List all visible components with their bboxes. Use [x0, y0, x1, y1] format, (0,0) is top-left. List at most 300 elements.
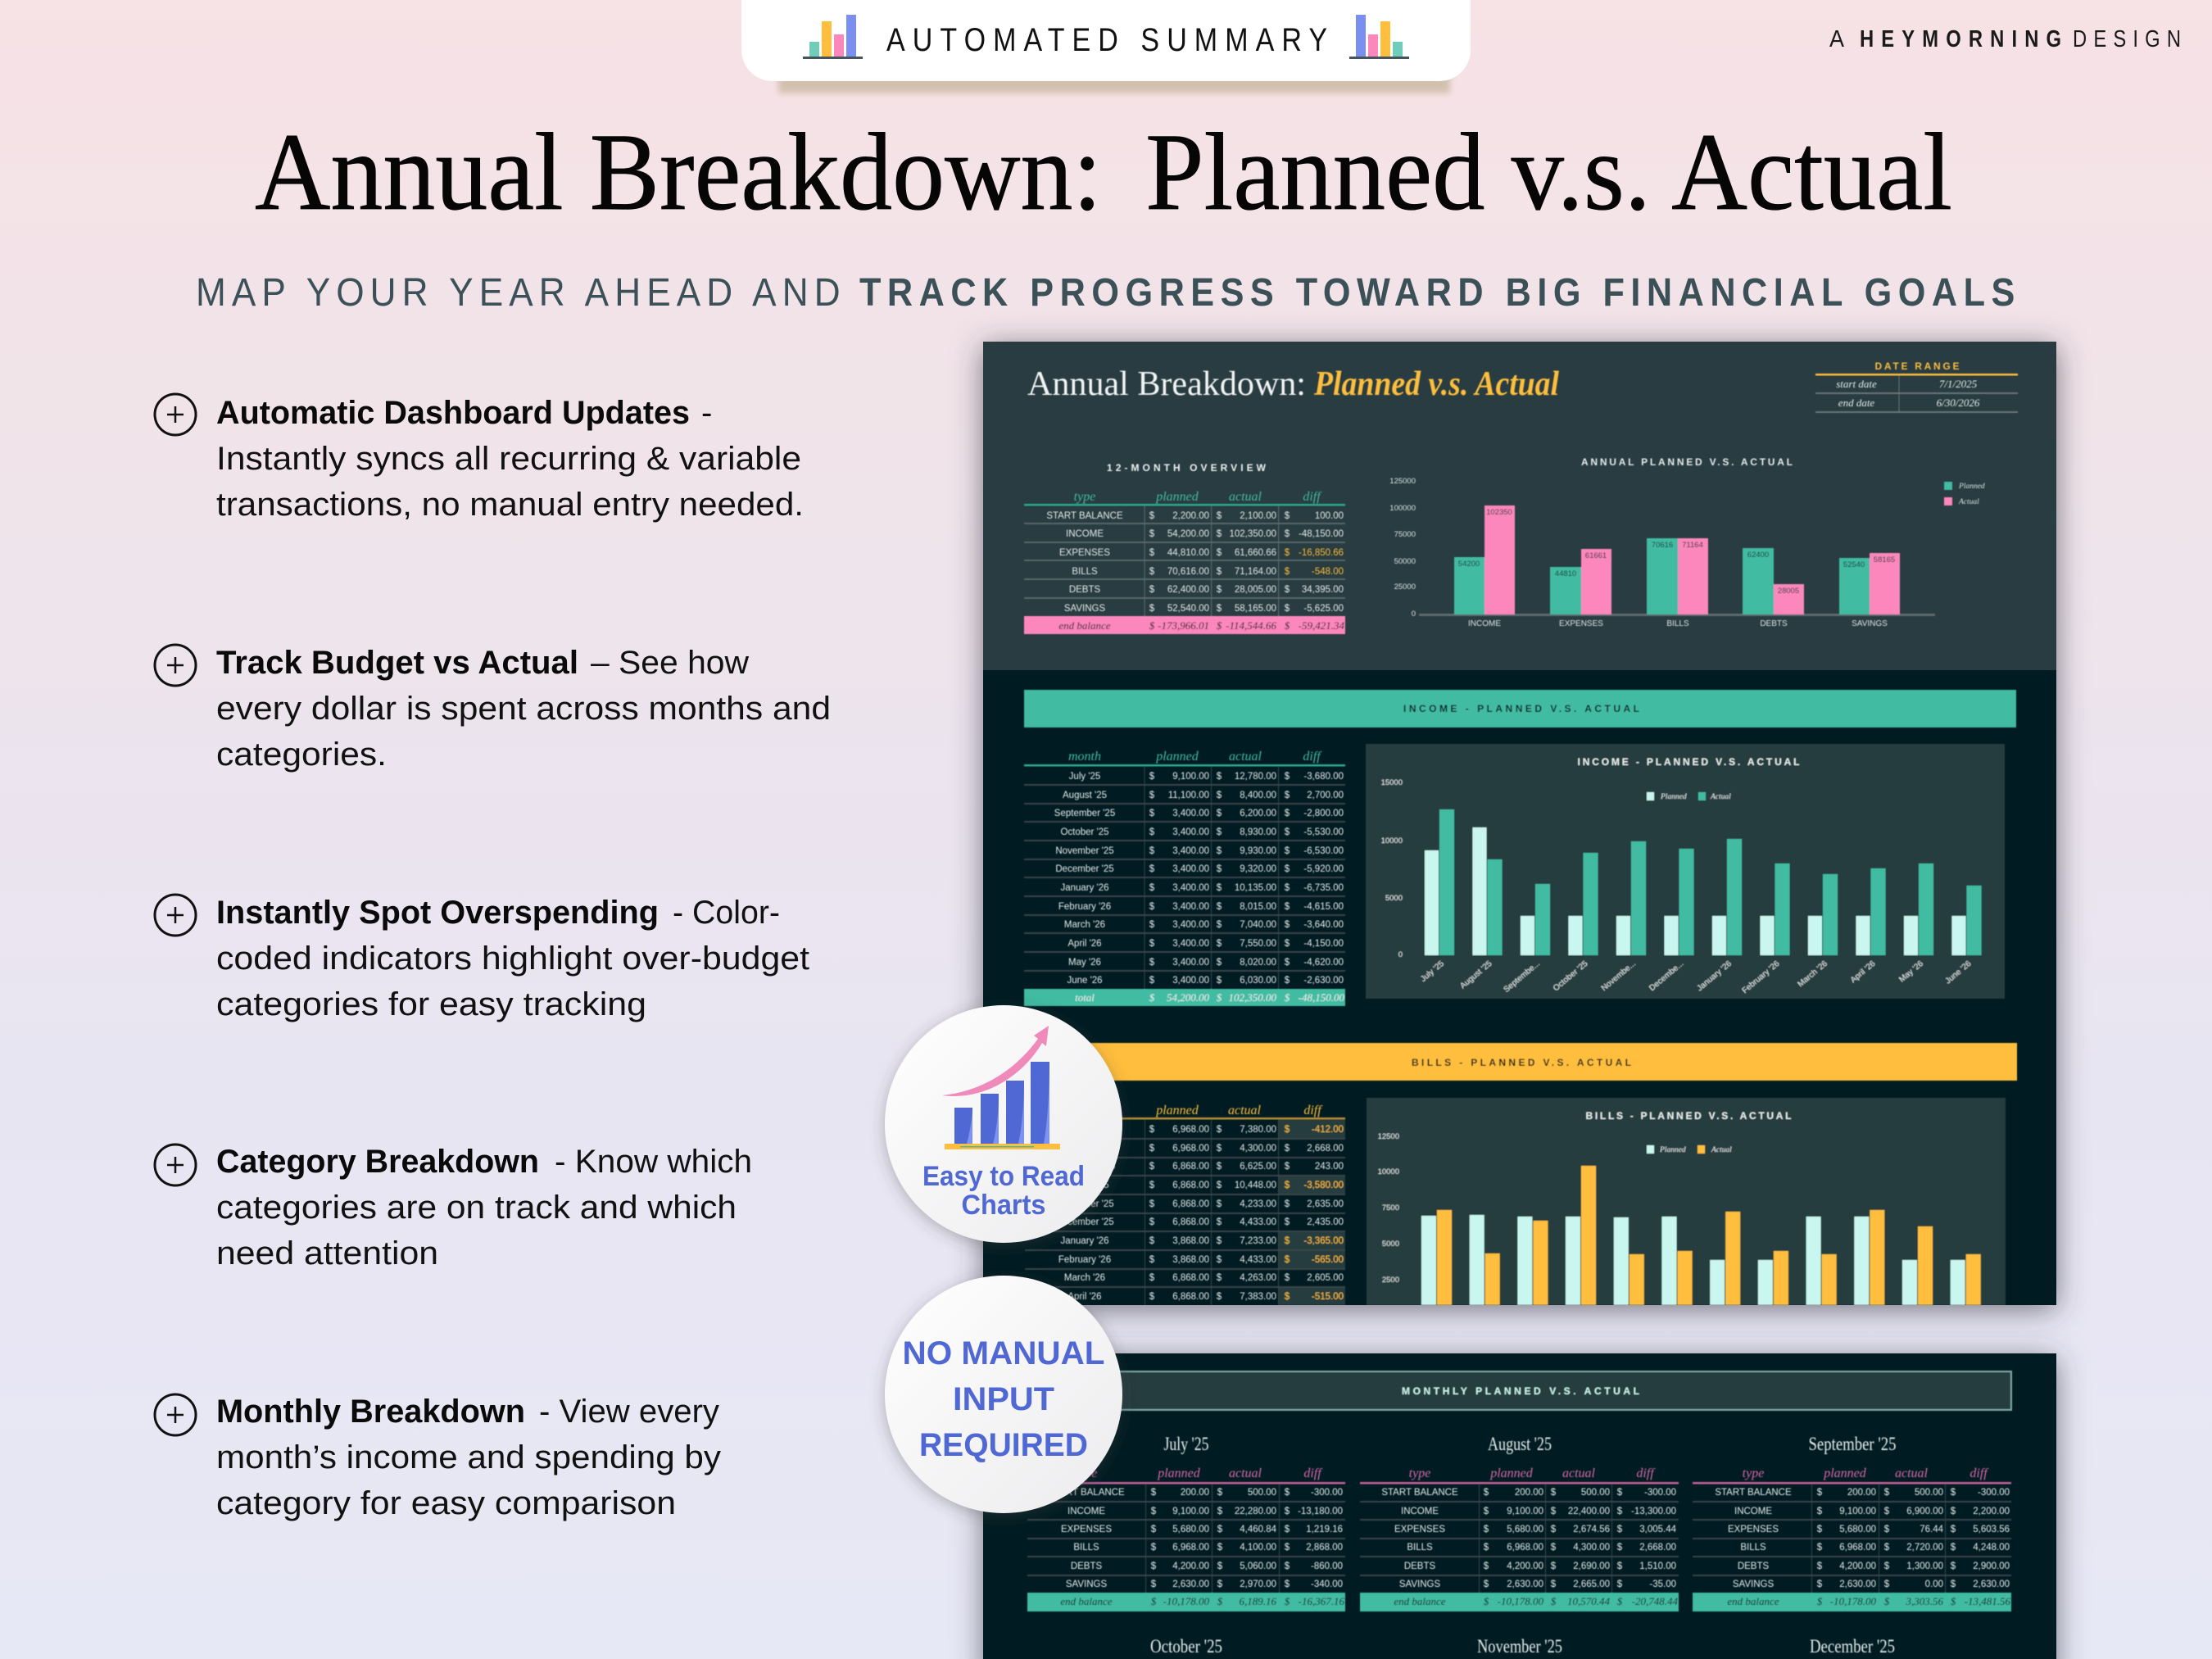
chart: bills planned vs actual: BILLS - PLANNED V.S. ACTUAL	[1586, 1110, 1791, 1122]
subtitle	[196, 270, 2015, 315]
table: bills by month: $	[1217, 1199, 1222, 1209]
table: bills by month: $	[1217, 1162, 1222, 1172]
table: bills by month: $	[1149, 1144, 1155, 1154]
table: august: $	[1551, 1488, 1557, 1498]
table: income by month: $	[1285, 976, 1290, 986]
table: bills by month: April '26	[1067, 1292, 1102, 1302]
table: 12-month overview: -5,625.00	[1303, 604, 1344, 614]
table: 12-month overview: -59,421.34	[1299, 619, 1344, 632]
table: august: -20,748.44	[1632, 1595, 1678, 1607]
table: bills by month: $	[1149, 1162, 1155, 1172]
table: july: SAVINGS	[1066, 1580, 1107, 1589]
table: september: $	[1884, 1507, 1890, 1516]
table: income by month: November '25	[1055, 846, 1114, 856]
table: bills by month: 7,380.00	[1240, 1125, 1276, 1135]
table: july: diff	[1303, 1466, 1323, 1480]
table: 12-month overview: 62,400.00	[1167, 585, 1209, 595]
table: september: -300.00	[1978, 1488, 2010, 1498]
table: bills by month: 3,868.00	[1172, 1255, 1209, 1265]
month headings	[1150, 1434, 1896, 1657]
date range table: start date	[1836, 378, 1877, 390]
table: july: 500.00	[1248, 1488, 1276, 1498]
chart: annual planned vs actual: Actual	[1958, 498, 1979, 506]
month headings: July '25	[1163, 1434, 1209, 1454]
table: bills by month: 4,263.00	[1240, 1273, 1276, 1283]
table: income by month: $	[1149, 827, 1155, 837]
table: august: $	[1551, 1562, 1557, 1571]
table: september: 1,300.00	[1906, 1562, 1943, 1571]
table: income by month: $	[1285, 772, 1290, 782]
table: income by month: $	[1217, 991, 1222, 1004]
table: 12-month overview: $	[1285, 585, 1290, 595]
table: 12-month overview: 52,540.00	[1167, 604, 1209, 614]
table: july: 4,200.00	[1172, 1562, 1209, 1571]
table: july: 6,968.00	[1172, 1543, 1209, 1552]
table: 12-month overview: 71,164.00	[1235, 567, 1276, 577]
table: 12-month overview: START BALANCE	[1046, 511, 1123, 521]
table: income by month: 7,550.00	[1240, 939, 1276, 949]
table: income by month: -5,920.00	[1303, 864, 1344, 874]
table: 12-month overview: $	[1285, 604, 1290, 614]
table: august: 22,400.00	[1568, 1507, 1610, 1516]
table: 12-month overview: 28,005.00	[1235, 585, 1276, 595]
feature: instantly spot overspending: coded indicators highlight over-budget	[216, 941, 809, 977]
table: september: $	[1951, 1525, 1956, 1534]
table: september: end balance	[1727, 1595, 1779, 1607]
table: bills by month: $	[1149, 1273, 1155, 1283]
table: august: 2,674.56	[1573, 1525, 1610, 1534]
table: income by month: diff	[1303, 750, 1322, 764]
table: bills by month: February '26	[1058, 1255, 1111, 1265]
chart: annual planned vs actual: 75000	[1394, 530, 1416, 539]
table: july: START BALANCE	[1048, 1488, 1125, 1498]
table: bills by month: $	[1285, 1217, 1290, 1227]
table: august: $	[1551, 1543, 1557, 1552]
table: income by month: $	[1285, 791, 1290, 800]
table: september: $	[1951, 1543, 1956, 1552]
icon: plus circle	[155, 895, 196, 936]
table: bills by month: December '25	[1055, 1217, 1114, 1227]
table: september: 6,900.00	[1906, 1507, 1943, 1516]
table: 12-month overview: end balance	[1058, 619, 1111, 632]
table: bills by month: $	[1149, 1181, 1155, 1190]
table: bills by month: 6,868.00	[1172, 1199, 1209, 1209]
badge: no manual input required: REQUIRED	[919, 1427, 1088, 1463]
month headings: November '25	[1477, 1636, 1562, 1657]
table: september: 6,968.00	[1839, 1543, 1876, 1552]
feature: track budget vs actual: Track Budget vs Actual	[216, 645, 578, 681]
icon: rising bar chart with arrow	[942, 1026, 1060, 1149]
table: income by month: $	[1217, 883, 1222, 893]
table: 12-month overview	[1024, 462, 1345, 634]
table: income by month: -48,150.00	[1299, 991, 1344, 1004]
table: bills by month: diff	[1303, 1104, 1323, 1117]
table: july: planned	[1157, 1466, 1201, 1480]
table: august: 3,005.44	[1639, 1525, 1677, 1534]
table: july: $	[1285, 1488, 1290, 1498]
chart: income planned vs actual	[1366, 744, 2005, 999]
table: income by month: July '25	[1069, 772, 1100, 782]
band: bills heading: BILLS - PLANNED V.S. ACTUAL	[1412, 1057, 1631, 1068]
table: bills by month: $	[1285, 1125, 1290, 1135]
table: september: INCOME	[1734, 1507, 1772, 1516]
table: bills by month: 243.00	[1315, 1162, 1344, 1172]
table: income by month: $	[1149, 883, 1155, 893]
table: august: 2,668.00	[1639, 1543, 1676, 1552]
pill label: AUTOMATED SUMMARY	[886, 20, 1327, 58]
brand credit: A	[1829, 26, 1845, 52]
table: september: $	[1884, 1543, 1890, 1552]
table: bills by month: $	[1285, 1162, 1290, 1172]
brand credit: DESIGN	[2073, 25, 2181, 52]
table: income by month: -2,800.00	[1303, 809, 1344, 818]
chart: annual planned vs actual: 100000	[1389, 504, 1416, 513]
table: september: $	[1951, 1580, 1956, 1589]
top pill: automated summary	[741, 0, 1471, 93]
feature: instantly spot overspending: categories for easy tracking	[216, 986, 646, 1022]
month headings: August '25	[1488, 1434, 1552, 1454]
table: august: planned	[1489, 1466, 1534, 1480]
table: september: 4,248.00	[1973, 1543, 2010, 1552]
title: Annual Breakdown:	[255, 111, 1102, 233]
feature: category breakdown: Category Breakdown	[216, 1144, 539, 1180]
chart: income planned vs actual: 0	[1398, 950, 1403, 959]
chart: annual planned vs actual: BILLS	[1666, 619, 1689, 628]
table: bills by month: 4,433.00	[1240, 1255, 1276, 1265]
table: 12-month overview: -114,544.66	[1226, 619, 1276, 632]
table: august: $	[1617, 1488, 1623, 1498]
chart: annual planned vs actual: 62400	[1747, 551, 1769, 560]
chart: income planned vs actual: June '26	[1944, 959, 1974, 986]
table: 12-month overview: $	[1285, 529, 1290, 539]
feature: category breakdown: categories are on track and which	[216, 1190, 737, 1226]
table: september: actual	[1895, 1466, 1929, 1480]
table: july: 1,219.16	[1306, 1525, 1343, 1534]
table: july: 4,100.00	[1240, 1543, 1276, 1552]
table: income by month: 3,400.00	[1172, 920, 1209, 930]
table: september: $	[1817, 1488, 1823, 1498]
table: income by month: 3,400.00	[1172, 827, 1209, 837]
dashboard heading: Annual Breakdown:	[1027, 365, 1306, 403]
table: july: $	[1285, 1543, 1290, 1552]
table: 12-month overview: $	[1149, 619, 1155, 632]
table: 12-month overview: 54,200.00	[1167, 529, 1209, 539]
subtitle: MAP YOUR YEAR AHEAD AND	[196, 270, 841, 314]
table: bills by month: $	[1149, 1255, 1155, 1265]
badge: no manual input required: NO MANUAL	[903, 1335, 1104, 1371]
table: 12-month overview: 44,810.00	[1167, 548, 1209, 558]
table: september: 2,630.00	[1973, 1580, 2010, 1589]
table: september: planned	[1823, 1466, 1867, 1480]
feature: category breakdown: - Know which	[555, 1144, 752, 1180]
table: september: START BALANCE	[1715, 1488, 1792, 1498]
table: july: $	[1285, 1562, 1290, 1571]
table: september: $	[1951, 1488, 1956, 1498]
chart: annual planned vs actual: ANNUAL PLANNED V.S. ACTUAL	[1581, 456, 1793, 468]
table: income by month: April '26	[1067, 939, 1102, 949]
chart: annual planned vs actual: 70616	[1652, 541, 1673, 550]
table: income by month: month	[1068, 750, 1101, 764]
table: income by month: 3,400.00	[1172, 958, 1209, 968]
table: july: INCOME	[1067, 1507, 1105, 1516]
table: bills by month: 6,868.00	[1172, 1273, 1209, 1283]
table: july: 2,868.00	[1306, 1543, 1343, 1552]
table: september: 0.00	[1925, 1580, 1943, 1589]
table: income by month: -3,680.00	[1303, 772, 1344, 782]
table: bills by month: August '25	[1063, 1144, 1107, 1154]
chart: income planned vs actual: Novembe...	[1600, 959, 1638, 993]
table: income by month: $	[1217, 772, 1222, 782]
chart: income planned vs actual: Actual	[1710, 793, 1731, 801]
table: income by month: May '26	[1068, 958, 1101, 968]
feature: automatic dashboard updates: Instantly syncs all recurring & variable	[216, 441, 801, 477]
table: august: $	[1617, 1580, 1623, 1589]
table: income by month: October '25	[1060, 827, 1109, 837]
table: income by month: $	[1285, 939, 1290, 949]
table: july: 9,100.00	[1172, 1507, 1209, 1516]
table: income by month: 8,400.00	[1240, 791, 1276, 800]
table: income by month: 102,350.00	[1229, 991, 1276, 1004]
table: income by month: -4,615.00	[1303, 902, 1344, 912]
table: july	[1027, 1466, 1345, 1611]
chart: income planned vs actual: 10000	[1381, 836, 1403, 845]
chart: annual planned vs actual: 54200	[1458, 560, 1480, 569]
table: september: $	[1817, 1580, 1823, 1589]
table: july: $	[1151, 1488, 1157, 1498]
band: monthly heading: MONTHLY PLANNED V.S. ACTUAL	[1402, 1385, 1639, 1397]
title: Planned v.s. Actual	[1145, 111, 1952, 233]
table: income by month: -4,620.00	[1303, 958, 1344, 968]
table: september: $	[1951, 1595, 1956, 1607]
table: august: -10,178.00	[1498, 1595, 1543, 1607]
table: income by month: -2,630.00	[1303, 976, 1344, 986]
feature: monthly breakdown	[155, 1394, 721, 1521]
chart: annual planned vs actual: EXPENSES	[1559, 619, 1603, 628]
table: income by month: -3,640.00	[1303, 920, 1344, 930]
chart: annual planned vs actual: DEBTS	[1760, 619, 1788, 628]
band: income heading	[1024, 690, 2016, 728]
table: bills by month: 6,868.00	[1172, 1292, 1209, 1302]
panel: annual dashboard screenshot	[983, 342, 2056, 1305]
feature: automatic dashboard updates: Automatic Dashboard Updates	[216, 395, 690, 431]
table: bills by month: planned	[1155, 1104, 1199, 1117]
chart: annual planned vs actual: 28005	[1778, 587, 1799, 596]
table: bills by month: $	[1285, 1236, 1290, 1246]
table: bills by month: $	[1285, 1144, 1290, 1154]
table: 12-month overview: 2,100.00	[1240, 511, 1276, 521]
month headings: October '25	[1150, 1636, 1222, 1657]
chart: annual planned vs actual: 25000	[1394, 582, 1416, 592]
table: bills by month: $	[1217, 1144, 1222, 1154]
table: september: 9,100.00	[1839, 1507, 1876, 1516]
table: bills by month: $	[1217, 1255, 1222, 1265]
table: july: $	[1151, 1507, 1157, 1516]
table: september: type	[1743, 1466, 1764, 1480]
table: august: 6,968.00	[1507, 1543, 1543, 1552]
table: income by month: $	[1217, 902, 1222, 912]
table: income by month: -4,150.00	[1303, 939, 1344, 949]
table: august: $	[1484, 1595, 1489, 1607]
table: september: 2,720.00	[1906, 1543, 1943, 1552]
table: september: EXPENSES	[1728, 1525, 1779, 1534]
feature: monthly breakdown: category for easy comparison	[216, 1485, 676, 1521]
table: income by month: $	[1217, 920, 1222, 930]
table: august: $	[1484, 1562, 1489, 1571]
table: 12-month overview: $	[1217, 529, 1222, 539]
title	[255, 111, 1952, 233]
icon: plus circle	[155, 1145, 196, 1185]
table: september: $	[1884, 1595, 1890, 1607]
table: bills by month: $	[1217, 1292, 1222, 1302]
month headings: September '25	[1809, 1434, 1896, 1454]
table: income by month: $	[1149, 976, 1155, 986]
table: bills by month: $	[1217, 1217, 1222, 1227]
table: august: 2,690.00	[1573, 1562, 1610, 1571]
table: august: 10,570.44	[1567, 1595, 1611, 1607]
table: bills by month: $	[1217, 1236, 1222, 1246]
table: income by month: 9,930.00	[1240, 846, 1276, 856]
table: july: $	[1151, 1595, 1157, 1607]
date range table: 6/30/2026	[1937, 397, 1980, 409]
table: bills by month: $	[1149, 1236, 1155, 1246]
table: income by month: actual	[1229, 750, 1262, 764]
table: july: 5,680.00	[1172, 1525, 1209, 1534]
table: income by month: $	[1149, 958, 1155, 968]
table: august: type	[1409, 1466, 1430, 1480]
chart: income planned vs actual: January '26	[1695, 959, 1734, 993]
table: bills by month: -3,580.00	[1303, 1181, 1344, 1190]
table: income by month: $	[1149, 939, 1155, 949]
table: income by month: $	[1149, 809, 1155, 818]
table: september	[1693, 1466, 2011, 1611]
table: september: $	[1817, 1507, 1823, 1516]
table: august: START BALANCE	[1381, 1488, 1458, 1498]
table: august: actual	[1562, 1466, 1596, 1480]
table: august: EXPENSES	[1394, 1525, 1445, 1534]
feature: category breakdown	[155, 1144, 752, 1271]
table: income by month: -5,530.00	[1303, 827, 1344, 837]
table: july: 200.00	[1181, 1488, 1209, 1498]
subtitle: TRACK PROGRESS TOWARD BIG FINANCIAL GOALS	[859, 270, 2015, 315]
table: income by month: February '26	[1058, 902, 1111, 912]
table: income by month: June '26	[1067, 976, 1103, 986]
date range table: 7/1/2025	[1939, 378, 1978, 390]
table: august: $	[1617, 1525, 1623, 1534]
chart: annual planned vs actual: 50000	[1394, 557, 1416, 566]
table: income by month: $	[1285, 883, 1290, 893]
table: august: diff	[1636, 1466, 1656, 1480]
table: 12-month overview: $	[1285, 511, 1290, 521]
table: july: 6,189.16	[1239, 1595, 1276, 1607]
table: income by month: $	[1149, 791, 1155, 800]
table: august: $	[1617, 1543, 1623, 1552]
table: bills by month: -3,365.00	[1303, 1236, 1344, 1246]
table: income by month: $	[1217, 958, 1222, 968]
icon: plus circle	[155, 1394, 196, 1435]
table: income by month: $	[1149, 991, 1155, 1004]
table: income by month: 3,400.00	[1172, 846, 1209, 856]
table: july: type	[1076, 1466, 1097, 1480]
table: income by month: 9,100.00	[1172, 772, 1209, 782]
table: bills by month: $	[1217, 1181, 1222, 1190]
table: august: -13,300.00	[1631, 1507, 1676, 1516]
table: 12-month overview: 70,616.00	[1167, 567, 1209, 577]
table: july: 2,630.00	[1172, 1580, 1209, 1589]
table: bills by month: October '25	[1060, 1181, 1109, 1190]
table: 12-month overview: 12-MONTH OVERVIEW	[1107, 462, 1267, 474]
chart: income planned vs actual: March '26	[1796, 959, 1829, 989]
table: july: $	[1217, 1525, 1223, 1534]
icon: left bar chart	[803, 15, 863, 59]
table: july: -340.00	[1311, 1580, 1343, 1589]
table: income by month: $	[1149, 864, 1155, 874]
table: bills by month: $	[1285, 1181, 1290, 1190]
chart: bills planned vs actual: 12500	[1378, 1132, 1399, 1141]
table: bills by month: actual	[1228, 1104, 1262, 1117]
table: income by month: $	[1285, 864, 1290, 874]
feature: category breakdown: need attention	[216, 1235, 438, 1271]
table: bills by month	[1025, 1104, 1345, 1305]
table: income by month: $	[1285, 991, 1290, 1004]
table: september: $	[1884, 1580, 1890, 1589]
table: income by month: 11,100.00	[1168, 791, 1209, 800]
table: august: SAVINGS	[1399, 1580, 1440, 1589]
table: income by month: $	[1285, 809, 1290, 818]
brand credit	[1829, 25, 2181, 52]
table: july: $	[1151, 1562, 1157, 1571]
table: income by month: 8,930.00	[1240, 827, 1276, 837]
table: income by month: $	[1217, 939, 1222, 949]
table: income by month: 8,015.00	[1240, 902, 1276, 912]
band: bills heading	[1024, 1043, 2017, 1081]
table: 12-month overview: -173,966.01	[1158, 619, 1209, 632]
table: july: $	[1151, 1525, 1157, 1534]
table: 12-month overview: $	[1217, 585, 1222, 595]
table: income by month: $	[1285, 846, 1290, 856]
table: 12-month overview: 34,395.00	[1302, 585, 1344, 595]
table: september: SAVINGS	[1733, 1580, 1774, 1589]
table: income by month: $	[1217, 846, 1222, 856]
band: monthly heading	[1024, 1371, 2011, 1410]
table: bills by month: -565.00	[1312, 1255, 1344, 1265]
table: august: 1,510.00	[1639, 1562, 1676, 1571]
table: august: end balance	[1394, 1595, 1446, 1607]
table: income by month: $	[1217, 791, 1222, 800]
table: income by month	[1024, 750, 1345, 1006]
table: august: $	[1551, 1580, 1557, 1589]
table: income by month: 3,400.00	[1172, 976, 1209, 986]
table: 12-month overview: actual	[1229, 490, 1262, 504]
month headings: December '25	[1810, 1636, 1895, 1657]
table: july: 2,970.00	[1240, 1580, 1276, 1589]
feature: track budget vs actual: categories.	[216, 737, 387, 773]
table: bills by month: September '25	[1054, 1162, 1115, 1172]
icon: right bar chart	[1349, 15, 1409, 59]
badge label	[922, 1161, 1085, 1221]
table: bills by month: 2,435.00	[1307, 1217, 1344, 1227]
table: income by month: -6,735.00	[1303, 883, 1344, 893]
table: september: $	[1817, 1543, 1823, 1552]
table: bills by month: $	[1285, 1292, 1290, 1302]
chart: annual planned vs actual: 52540	[1843, 560, 1865, 569]
table: 12-month overview: $	[1149, 548, 1155, 558]
feature: instantly spot overspending: - Color-	[673, 895, 780, 931]
table: august: -35.00	[1649, 1580, 1676, 1589]
feature: track budget vs actual: – See how	[591, 645, 749, 681]
table: september: 3,303.56	[1906, 1595, 1943, 1607]
table: july: $	[1217, 1580, 1223, 1589]
table: august: 2,665.00	[1573, 1580, 1610, 1589]
